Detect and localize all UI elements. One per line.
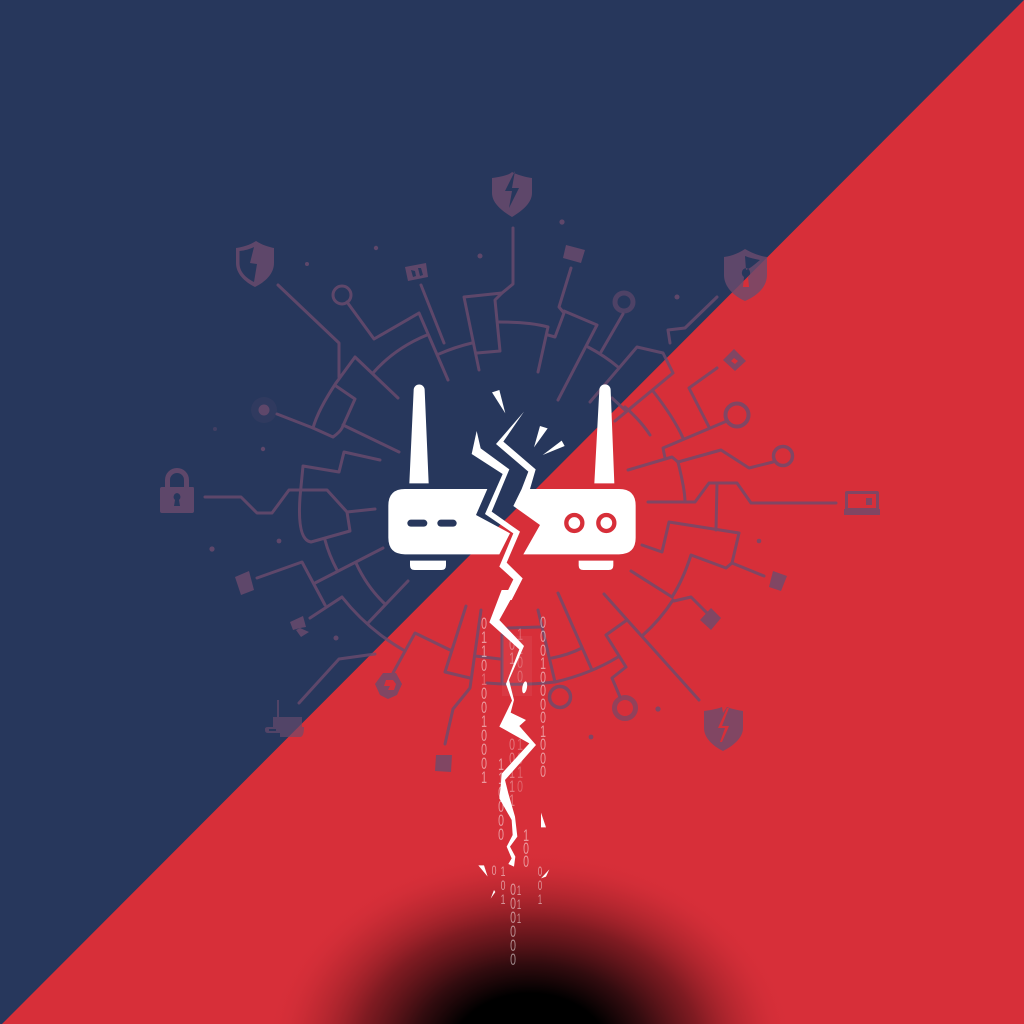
binary column short: 0 [523,838,529,858]
icon: rectangle top right [563,245,585,263]
icon: square bottom [435,755,452,772]
debris shards [478,681,549,899]
circuit network [160,171,880,772]
router split by crack [388,384,636,600]
binary column left: 0 [481,739,487,759]
binary column bottom: 0 [510,879,516,899]
left antenna [409,384,429,483]
icon: hexagon node [375,673,402,699]
binary fragments: 1 [517,884,521,899]
spark shards [492,390,565,455]
binary column left: 0 [481,683,487,703]
binary column mid: 0 [498,796,504,816]
binary column inner faint: 0 [517,748,523,768]
binary column inner faint: 1 [517,624,523,644]
binary column right: 0 [540,707,546,727]
binary column left: 0 [481,697,487,717]
icon: shield with keyhole [724,249,767,301]
traces: lower left [205,452,408,703]
binary column inner faint: 1 [517,762,523,782]
main bolt [489,590,536,867]
binary column left: 0 [481,613,487,633]
icon: shield top [492,171,532,217]
icon: padlock shackle [165,468,189,487]
small dots [209,219,761,739]
binary column mid: 1 [498,754,504,774]
binary column left: 0 [481,725,487,745]
binary column right: 0 [540,694,546,714]
binary fragments: 1 [538,893,542,908]
binary column left: 1 [481,669,487,689]
binary column inner faint: 1 [517,734,523,754]
binary fragments: 0 [538,879,542,894]
crack stripe left [472,431,523,600]
binary column mid: 0 [498,824,504,844]
binary column mid: 0 [498,782,504,802]
binary column right: 0 [540,667,546,687]
binary fragments: 0 [501,878,506,894]
binary column bottom: 0 [510,949,516,969]
icon: notched square lower left [290,616,309,637]
binary column short: 1 [523,825,529,845]
icon: tilted square left [235,571,254,595]
icon: shield lower right [704,707,743,751]
binary column centre: 1 [509,648,515,668]
traces: upper left [277,285,472,452]
binary column short: 0 [523,851,529,871]
icon: diamond [723,349,746,371]
solid icons and dots [160,171,880,772]
binary column right: 1 [540,653,546,673]
lower lightning crack [478,590,549,899]
binary column centre: 1 [509,790,515,810]
traces: upper right [590,297,836,530]
binary fragments: 1 [501,892,505,908]
binary column mid: 0 [498,810,504,830]
binary column left: 1 [481,767,487,787]
binary fragments: 1 [501,864,505,880]
binary data stream [481,612,546,969]
binary column left: 0 [481,753,487,773]
icon: laptop [844,491,880,515]
left status lights [407,520,457,527]
binary column centre: 0 [509,748,515,768]
binary column left: 1 [481,711,487,731]
binary column centre: 0 [509,734,515,754]
icon: rotated square lower right [700,608,721,630]
binary column left: 1 [481,641,487,661]
binary column right: 0 [540,640,546,660]
binary column centre: 1 [509,762,515,782]
binary column inner faint: 1 [517,638,523,658]
binary fragments: 1 [517,912,521,927]
right status rings [566,515,614,531]
binary column mid: 1 [498,768,504,788]
node rings [333,286,792,718]
binary column right: 0 [540,626,546,646]
icon: notched square top left [405,263,428,281]
traces: top centre [464,228,623,400]
binary fragments: 1 [517,898,521,913]
icon: padlock [160,487,194,513]
right foot [579,561,613,570]
left foot [410,561,446,570]
binary column right: 0 [540,734,546,754]
faint glow patch beside crack [502,636,532,696]
dark glow at bottom [240,840,820,1024]
binary column inner faint: 0 [517,666,523,686]
binary column bottom: 0 [510,921,516,941]
icon: shield upper left [236,241,274,287]
binary column left: 0 [481,655,487,675]
binary fragments: 0 [492,863,497,879]
crack stripe right [496,412,536,489]
traces: lower right [487,522,764,700]
binary fragments [492,863,542,927]
right antenna [594,384,614,483]
binary column right: 0 [540,748,546,768]
icon: halo node [251,397,277,423]
binary column right: 1 [540,721,546,741]
binary column bottom: 0 [510,935,516,955]
binary column right: 0 [540,680,546,700]
binary column inner faint: 0 [517,776,523,796]
binary column inner faint: 0 [517,652,523,672]
binary column bottom: 0 [510,893,516,913]
binary column centre: 0 [509,634,515,654]
right router body [513,489,636,554]
icon: tiny router [265,700,304,737]
icon: tilted square right [769,571,787,591]
binary column bottom: 0 [510,907,516,927]
binary column left: 1 [481,627,487,647]
binary column right: 0 [540,612,546,632]
binary column right: 0 [540,761,546,781]
left router body [388,489,510,554]
binary fragments: 0 [538,865,542,880]
traces: bottom centre [393,606,540,744]
binary column centre: 1 [509,776,515,796]
